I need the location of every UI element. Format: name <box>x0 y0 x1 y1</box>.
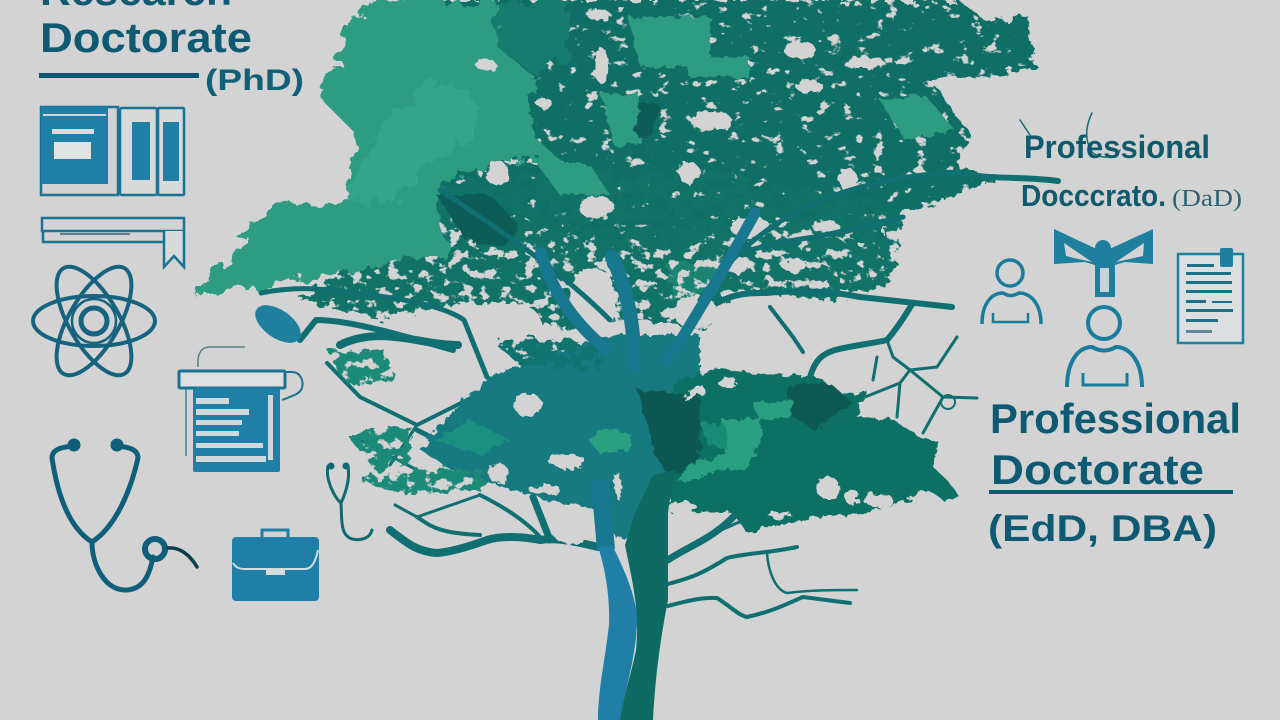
heading line: PhD: (PhD) <box>205 64 304 97</box>
label: professional: Professional <box>1024 129 1210 165</box>
heading: upper professional doctorate <box>1021 129 1242 213</box>
icon: clipboard <box>1178 248 1243 343</box>
heading line: doctorate: Doctorate <box>40 14 252 61</box>
icon: ribbon award <box>1054 229 1153 297</box>
icon: bookmark banner <box>42 218 184 267</box>
canopy: dark upper foliage <box>376 0 1035 250</box>
line: doctorate: Doctorate <box>991 446 1204 493</box>
canopy: medium teal patch <box>494 0 570 75</box>
blue limbs <box>541 213 755 550</box>
canopy: light green foliage, left <box>195 0 560 296</box>
underline <box>989 490 1233 494</box>
lower right dark foliage <box>638 367 960 533</box>
icon: large stethoscope <box>52 441 197 590</box>
trunk <box>598 470 675 720</box>
label: doctorate: Docccrato. <box>1021 178 1166 213</box>
icon: person left <box>982 260 1041 324</box>
branches: teal network <box>261 113 1120 617</box>
lower central gaps <box>488 393 621 545</box>
line: EdD, DBA: (EdD, DBA) <box>988 508 1217 549</box>
heading: lower professional doctorate <box>988 395 1241 549</box>
icon: small stethoscope <box>327 464 372 540</box>
tree illustration <box>195 0 1120 720</box>
canopy: open lower lacework <box>300 170 903 330</box>
branch: blue leaf <box>249 298 307 350</box>
heading: research doctorate <box>39 0 304 97</box>
icon: briefcase <box>232 530 319 601</box>
canopy: gaps between leaves <box>467 10 936 363</box>
lower right foliage gaps <box>669 377 893 518</box>
icon: atom <box>33 256 155 386</box>
icon: books <box>41 107 184 195</box>
central teal mass <box>420 335 700 540</box>
lower central green leaves <box>435 420 683 455</box>
label: DaD: (DaD) <box>1172 186 1242 212</box>
icon: person center <box>1067 307 1142 387</box>
line: professional: Professional <box>990 395 1241 442</box>
canopy: light green patches, centre <box>530 17 955 195</box>
heading underline <box>39 73 199 78</box>
icon: document box <box>179 347 303 472</box>
canopy: dark shade patch <box>437 100 660 247</box>
lower left leafy sprigs <box>327 340 600 495</box>
